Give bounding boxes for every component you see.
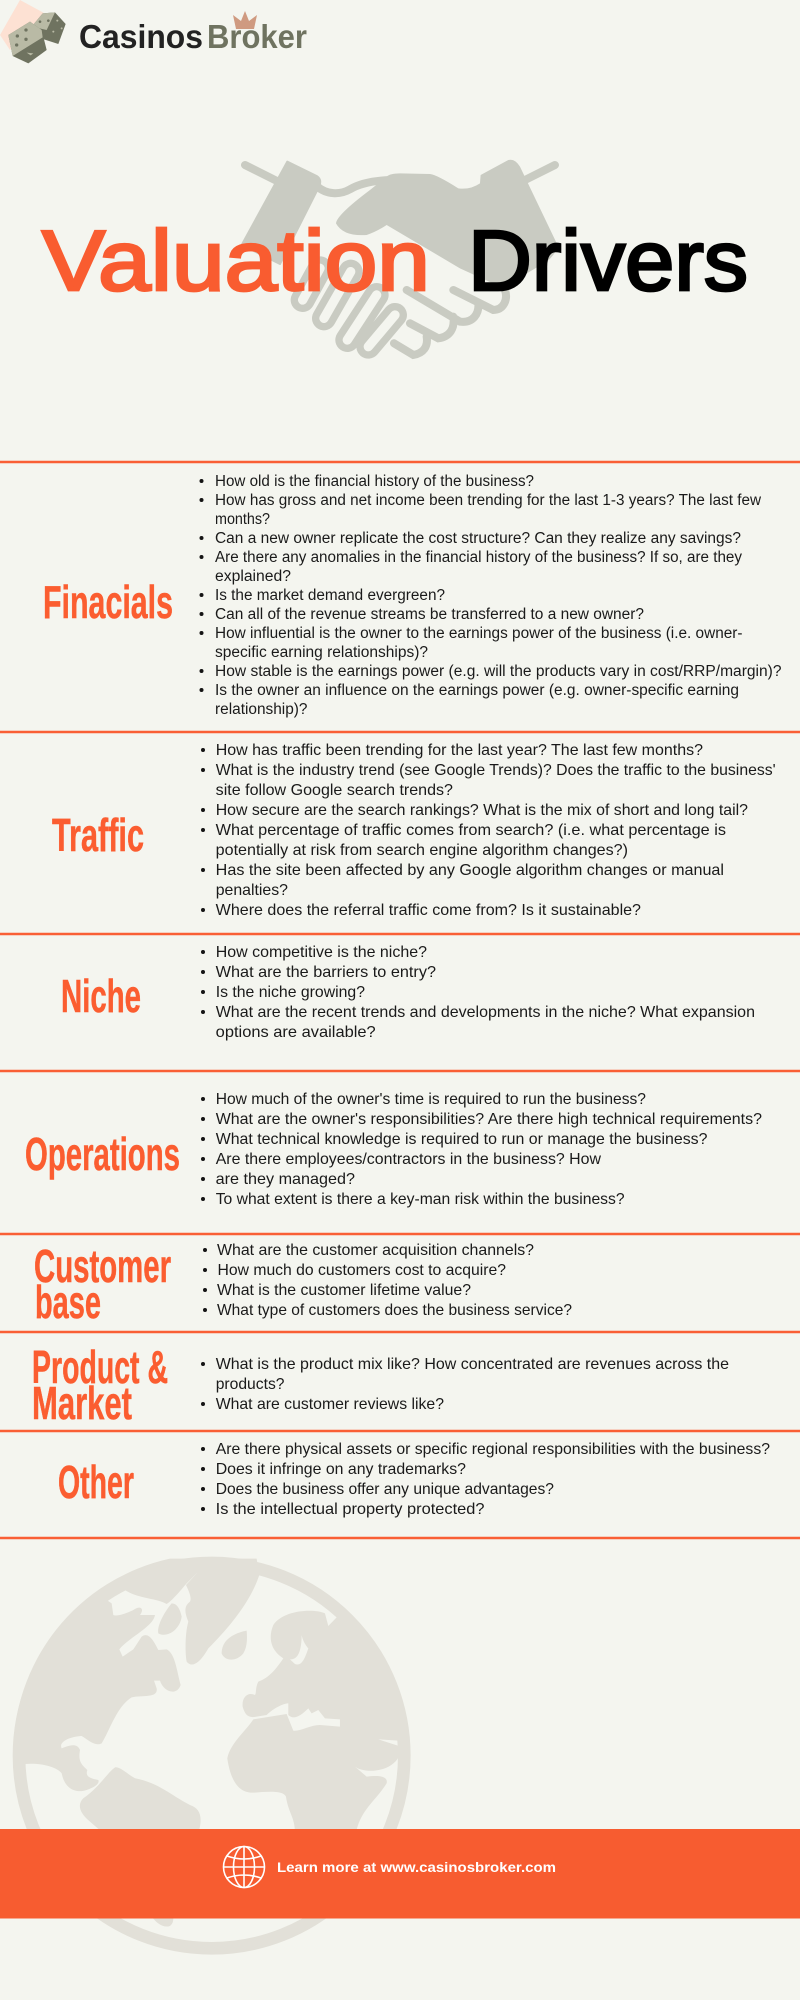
panel: niche [61, 944, 755, 1041]
list: financials questions: How has gross and net income been trending for the last 1-3 years? The last few [215, 492, 762, 509]
list: product and market questions: What is the product mix like? How concentrated are revenues across the [216, 1356, 729, 1373]
icon: dice with peach blob [0, 0, 66, 63]
list: product and market questions [201, 1356, 729, 1413]
icon: handshake watermark [242, 160, 558, 355]
list: customer base questions: What type of customers does the business service? [217, 1302, 572, 1319]
title [42, 214, 748, 309]
list: niche questions [201, 944, 755, 1041]
list: operations questions [201, 1091, 762, 1208]
panel: other [58, 1441, 770, 1518]
list: financials questions: Are there any anomalies in the financial history of the business? If so, are they [215, 549, 742, 566]
heading: Product & Market: Product & [32, 1341, 168, 1393]
panel: traffic [52, 742, 776, 919]
icon: crown [233, 11, 257, 29]
footer text: Learn more at www.casinosbroker.com [277, 1859, 556, 1875]
list: other questions: Does it infringe on any trademarks? [216, 1461, 466, 1478]
list: financials questions: relationship)? [215, 701, 308, 718]
list: traffic questions: Has the site been affected by any Google algorithm changes or manual [216, 862, 724, 879]
list: niche questions: options are available? [216, 1024, 376, 1041]
list: financials questions: specific earning relationships)? [215, 644, 428, 661]
list: other questions: Does the business offer any unique advantages? [216, 1481, 554, 1498]
list: customer base questions: What are the customer acquisition channels? [217, 1242, 534, 1259]
heading: Niche: Niche [61, 970, 141, 1022]
list: traffic questions: How has traffic been trending for the last year? The last few months? [216, 742, 703, 759]
list: traffic questions: What is the industry trend (see Google Trends)? Does the traffic to the business' [216, 762, 776, 779]
list: traffic questions: penalties? [216, 882, 288, 899]
list: operations questions: What technical knowledge is required to run or manage the business? [216, 1131, 708, 1148]
heading: Operations: Operations [25, 1128, 180, 1180]
list: traffic questions: Where does the referral traffic come from? Is it sustainable? [216, 902, 641, 919]
list: traffic questions: How secure are the search rankings? What is the mix of short and long tail? [216, 802, 748, 819]
list: traffic questions [201, 742, 776, 919]
heading: Customer base [34, 1240, 171, 1328]
list: operations questions: are they managed? [216, 1171, 355, 1188]
list: financials questions: How influential is the owner to the earnings power of the business (i.e. owner- [215, 625, 742, 642]
logo wordmark: Casinos [79, 18, 203, 55]
panel: customer base [34, 1240, 572, 1328]
heading: Traffic: Traffic [52, 809, 144, 861]
panel: operations [25, 1091, 762, 1208]
list: niche questions: What are the barriers to entry? [216, 964, 436, 981]
title: Drivers [468, 214, 748, 309]
list: operations questions: To what extent is there a key-man risk within the business? [216, 1191, 625, 1208]
list: financials questions: Can a new owner replicate the cost structure? Can they realize any savings? [215, 530, 741, 547]
list: financials questions: Is the market demand evergreen? [215, 587, 445, 604]
panel: product and market [32, 1341, 729, 1429]
list: niche questions: How competitive is the niche? [216, 944, 427, 961]
icon: globe watermark [13, 1559, 408, 1948]
logo wordmark: Broker [207, 18, 307, 55]
list: operations questions: Are there employees/contractors in the business? How [216, 1151, 601, 1168]
list: other questions: Is the intellectual property protected? [216, 1501, 485, 1518]
logo: CasinosBroker [0, 0, 307, 63]
panel: financials [43, 473, 782, 718]
list: product and market questions: products? [216, 1376, 285, 1393]
list: customer base questions: What is the customer lifetime value? [217, 1282, 471, 1299]
heading: Customer base: base [35, 1276, 101, 1328]
list: other questions: Are there physical assets or specific regional responsibilities with the business? [216, 1441, 770, 1458]
list: niche questions: What are the recent trends and developments in the niche? What expansion [216, 1004, 755, 1021]
list: financials questions: How stable is the earnings power (e.g. will the products vary in cost/RRP/margin)? [215, 663, 782, 680]
list: customer base questions: How much do customers cost to acquire? [218, 1262, 506, 1279]
list: operations questions: What are the owner's responsibilities? Are there high technical requirements? [216, 1111, 762, 1128]
heading: Product & Market: Market [32, 1377, 132, 1429]
footer banner [0, 1829, 800, 1918]
list: financials questions [200, 473, 782, 718]
list: financials questions: Can all of the revenue streams be transferred to a new owner? [215, 606, 644, 623]
list: niche questions: Is the niche growing? [216, 984, 365, 1001]
list: other questions [201, 1441, 770, 1518]
list: traffic questions: What percentage of traffic comes from search? (i.e. what percentage is [216, 822, 726, 839]
list: traffic questions: potentially at risk from search engine algorithm changes?) [216, 842, 628, 859]
list: financials questions: months? [215, 511, 270, 528]
list: financials questions: explained? [215, 568, 291, 585]
list: financials questions: Is the owner an influence on the earnings power (e.g. owner-specific earning [215, 682, 739, 699]
heading: Product & Market [32, 1341, 168, 1429]
list: operations questions: How much of the owner's time is required to run the business? [216, 1091, 646, 1108]
list: financials questions: How old is the financial history of the business? [215, 473, 534, 490]
heading: Customer base: Customer [34, 1240, 171, 1292]
heading: Finacials: Finacials [43, 576, 173, 628]
title: Valuation [42, 214, 430, 309]
icon: globe outline [224, 1846, 264, 1888]
list: customer base questions [203, 1242, 572, 1319]
heading: Other: Other [58, 1456, 134, 1508]
list: product and market questions: What are customer reviews like? [216, 1396, 444, 1413]
list: traffic questions: site follow Google search trends? [216, 782, 453, 799]
